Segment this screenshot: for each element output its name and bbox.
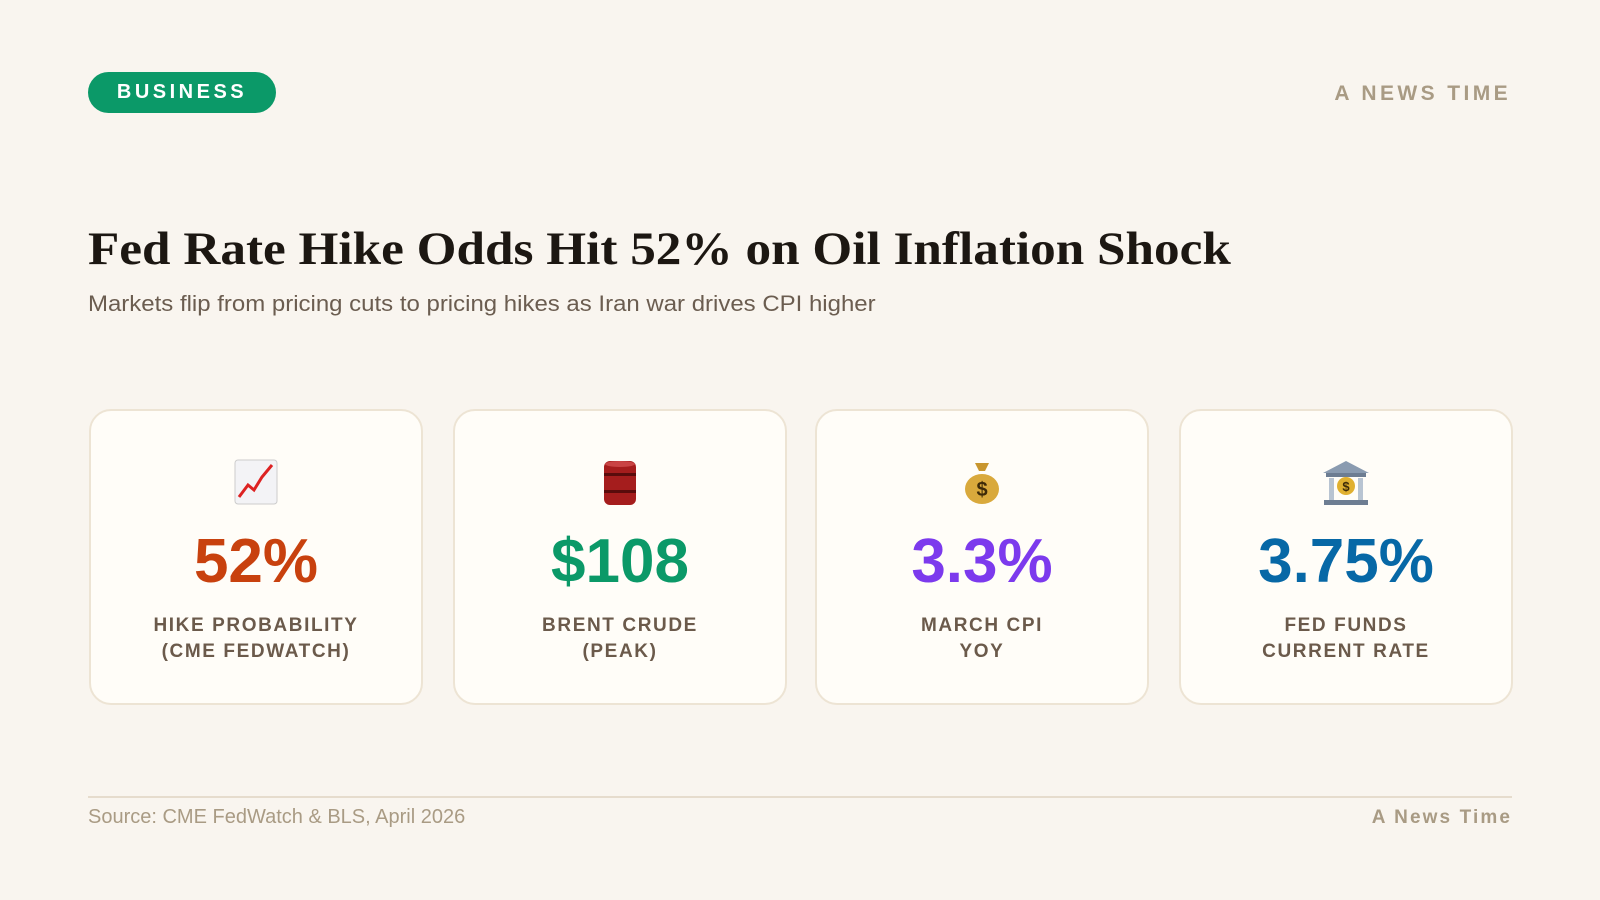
icon: bank: [1323, 461, 1369, 505]
label: YOY: [960, 641, 1004, 662]
category pill: BUSINESS: [117, 81, 247, 103]
card: march cpi: [815, 409, 1149, 705]
category pill: [88, 72, 276, 113]
label: (PEAK): [582, 641, 658, 662]
label: HIKE PROBABILITY: [153, 615, 359, 636]
label: FED FUNDS: [1284, 615, 1408, 636]
label: [1262, 615, 1430, 662]
icon: money bag: [965, 463, 999, 504]
icon: bank: $: [1342, 479, 1350, 494]
label: MARCH CPI: [921, 615, 1043, 636]
card: fed funds: [1179, 409, 1513, 705]
icon: chart: [234, 460, 278, 504]
value: $108: [551, 527, 689, 596]
card: brent crude: [453, 409, 787, 705]
icon: oil barrel: [604, 461, 636, 505]
value: 52%: [194, 527, 318, 596]
value: 3.3%: [911, 527, 1053, 596]
subtitle: Markets flip from pricing cuts to pricing hikes as Iran war drives CPI higher: [88, 291, 876, 316]
label: [153, 615, 359, 662]
card: hike probability: [89, 409, 423, 705]
source note: Source: CME FedWatch & BLS, April 2026: [88, 806, 465, 828]
footer brand: A News Time: [1372, 807, 1512, 828]
label: BRENT CRUDE: [542, 615, 698, 636]
label: (CME FEDWATCH): [162, 641, 350, 662]
label: CURRENT RATE: [1262, 641, 1430, 662]
icon: money bag: $: [976, 479, 988, 501]
value: 3.75%: [1258, 527, 1434, 596]
label: [542, 615, 698, 662]
brand header: A NEWS TIME: [1334, 82, 1511, 105]
title: Fed Rate Hike Odds Hit 52% on Oil Inflation Shock: [88, 223, 1231, 275]
label: [921, 615, 1043, 662]
